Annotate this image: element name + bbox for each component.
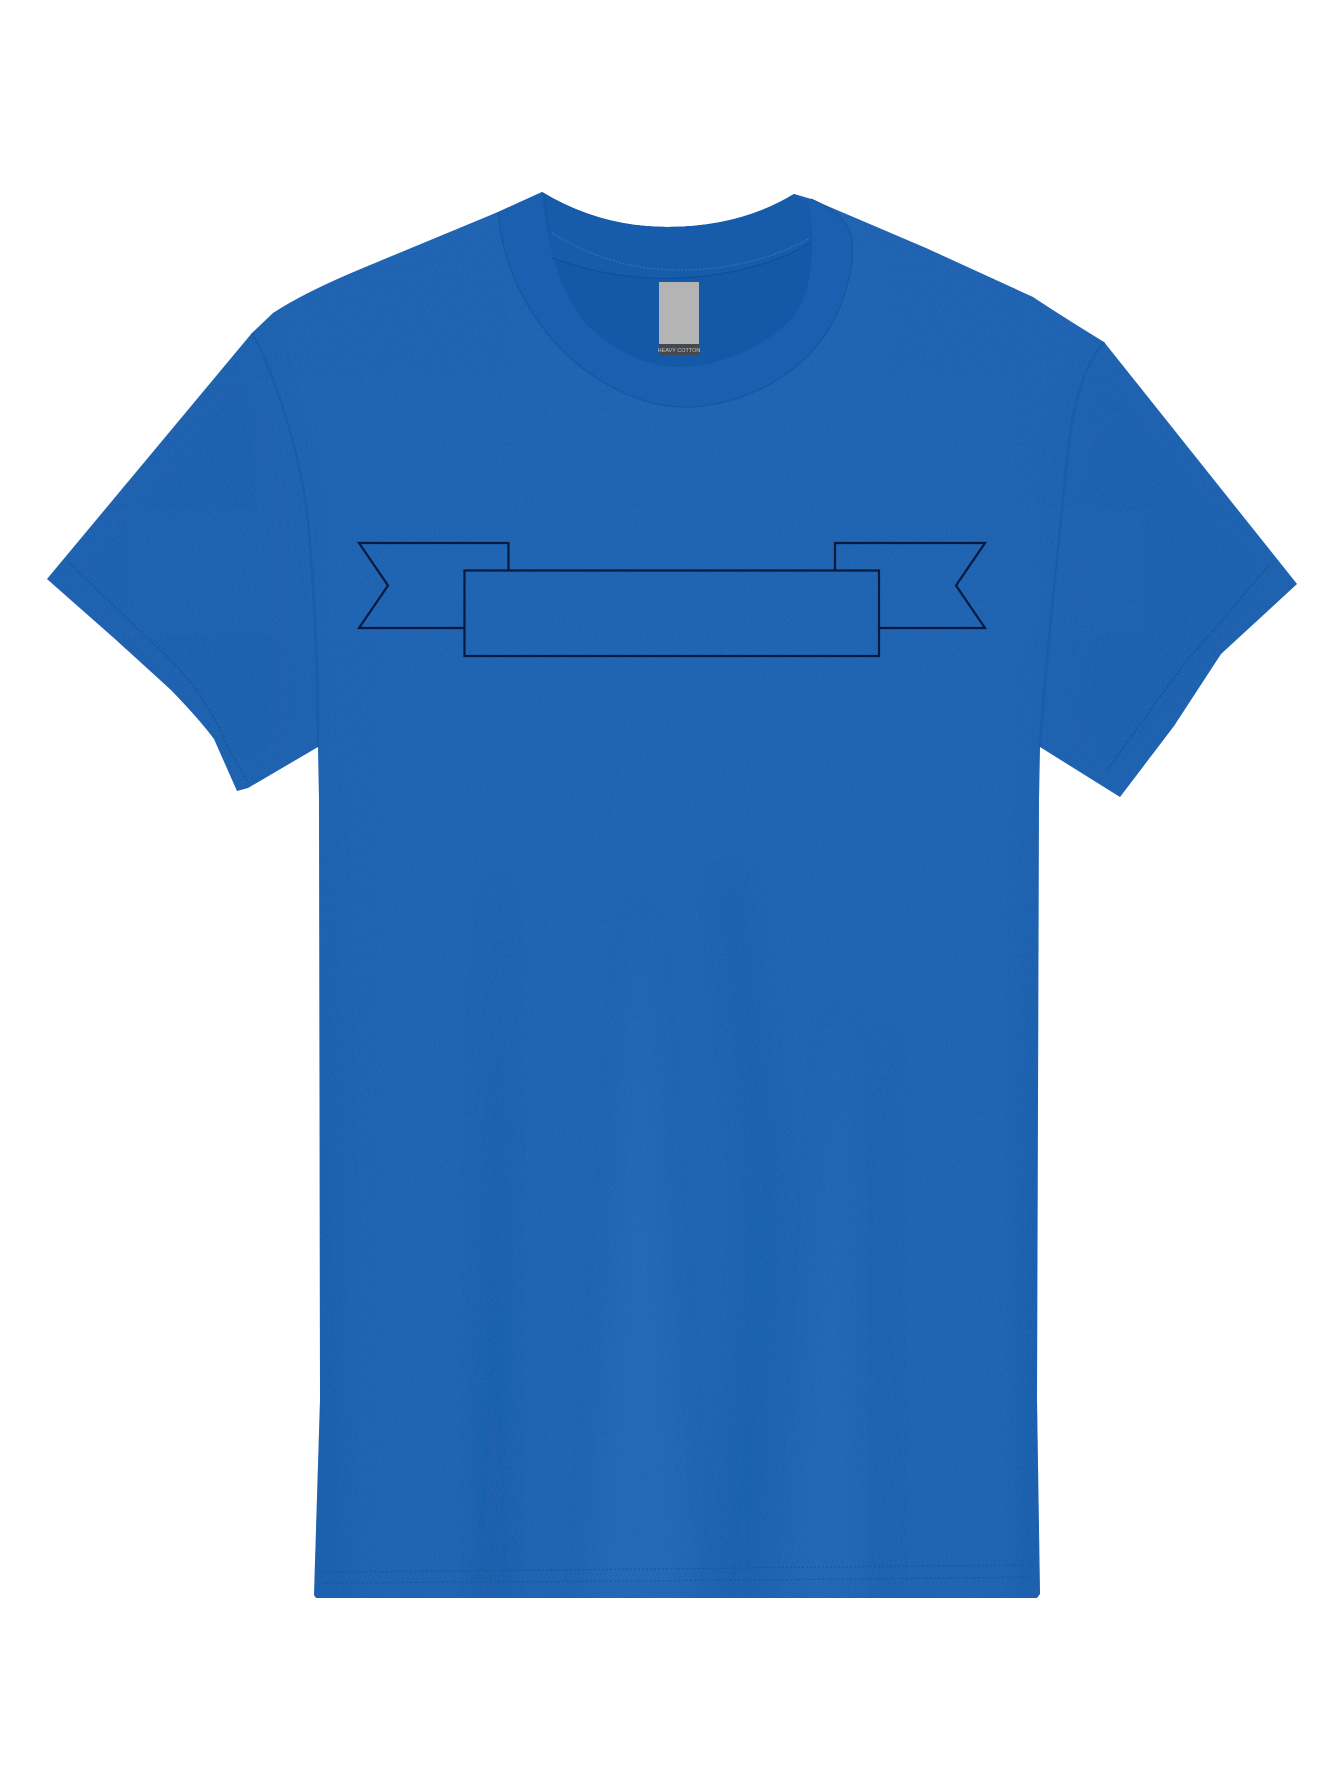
neck band stitching	[552, 233, 810, 270]
t-shirt	[47, 192, 1297, 1598]
bottom hem stitching	[322, 1565, 1034, 1583]
right sleeve hem stitching	[1106, 566, 1268, 772]
shirt body and sleeves	[47, 192, 1297, 1598]
fabric shading and folds	[48, 192, 1296, 1598]
collar seam	[498, 199, 853, 407]
right ribbon tail	[835, 543, 985, 628]
neck band seam	[552, 243, 810, 278]
left ribbon tail	[359, 543, 508, 628]
left sleeve hem stitching	[68, 561, 248, 782]
right sleeve seam	[1040, 342, 1104, 747]
neck tag: HEAVY COTTON	[658, 348, 700, 354]
left sleeve seam	[252, 333, 318, 747]
neck tag	[658, 282, 700, 355]
inside back neck	[542, 192, 812, 367]
central banner panel	[464, 570, 879, 656]
illustration: blue t-shirt with banner	[47, 192, 1297, 1598]
collar ribbing	[498, 192, 853, 407]
ribbon banner outline	[359, 543, 985, 656]
back neck band	[546, 194, 810, 278]
